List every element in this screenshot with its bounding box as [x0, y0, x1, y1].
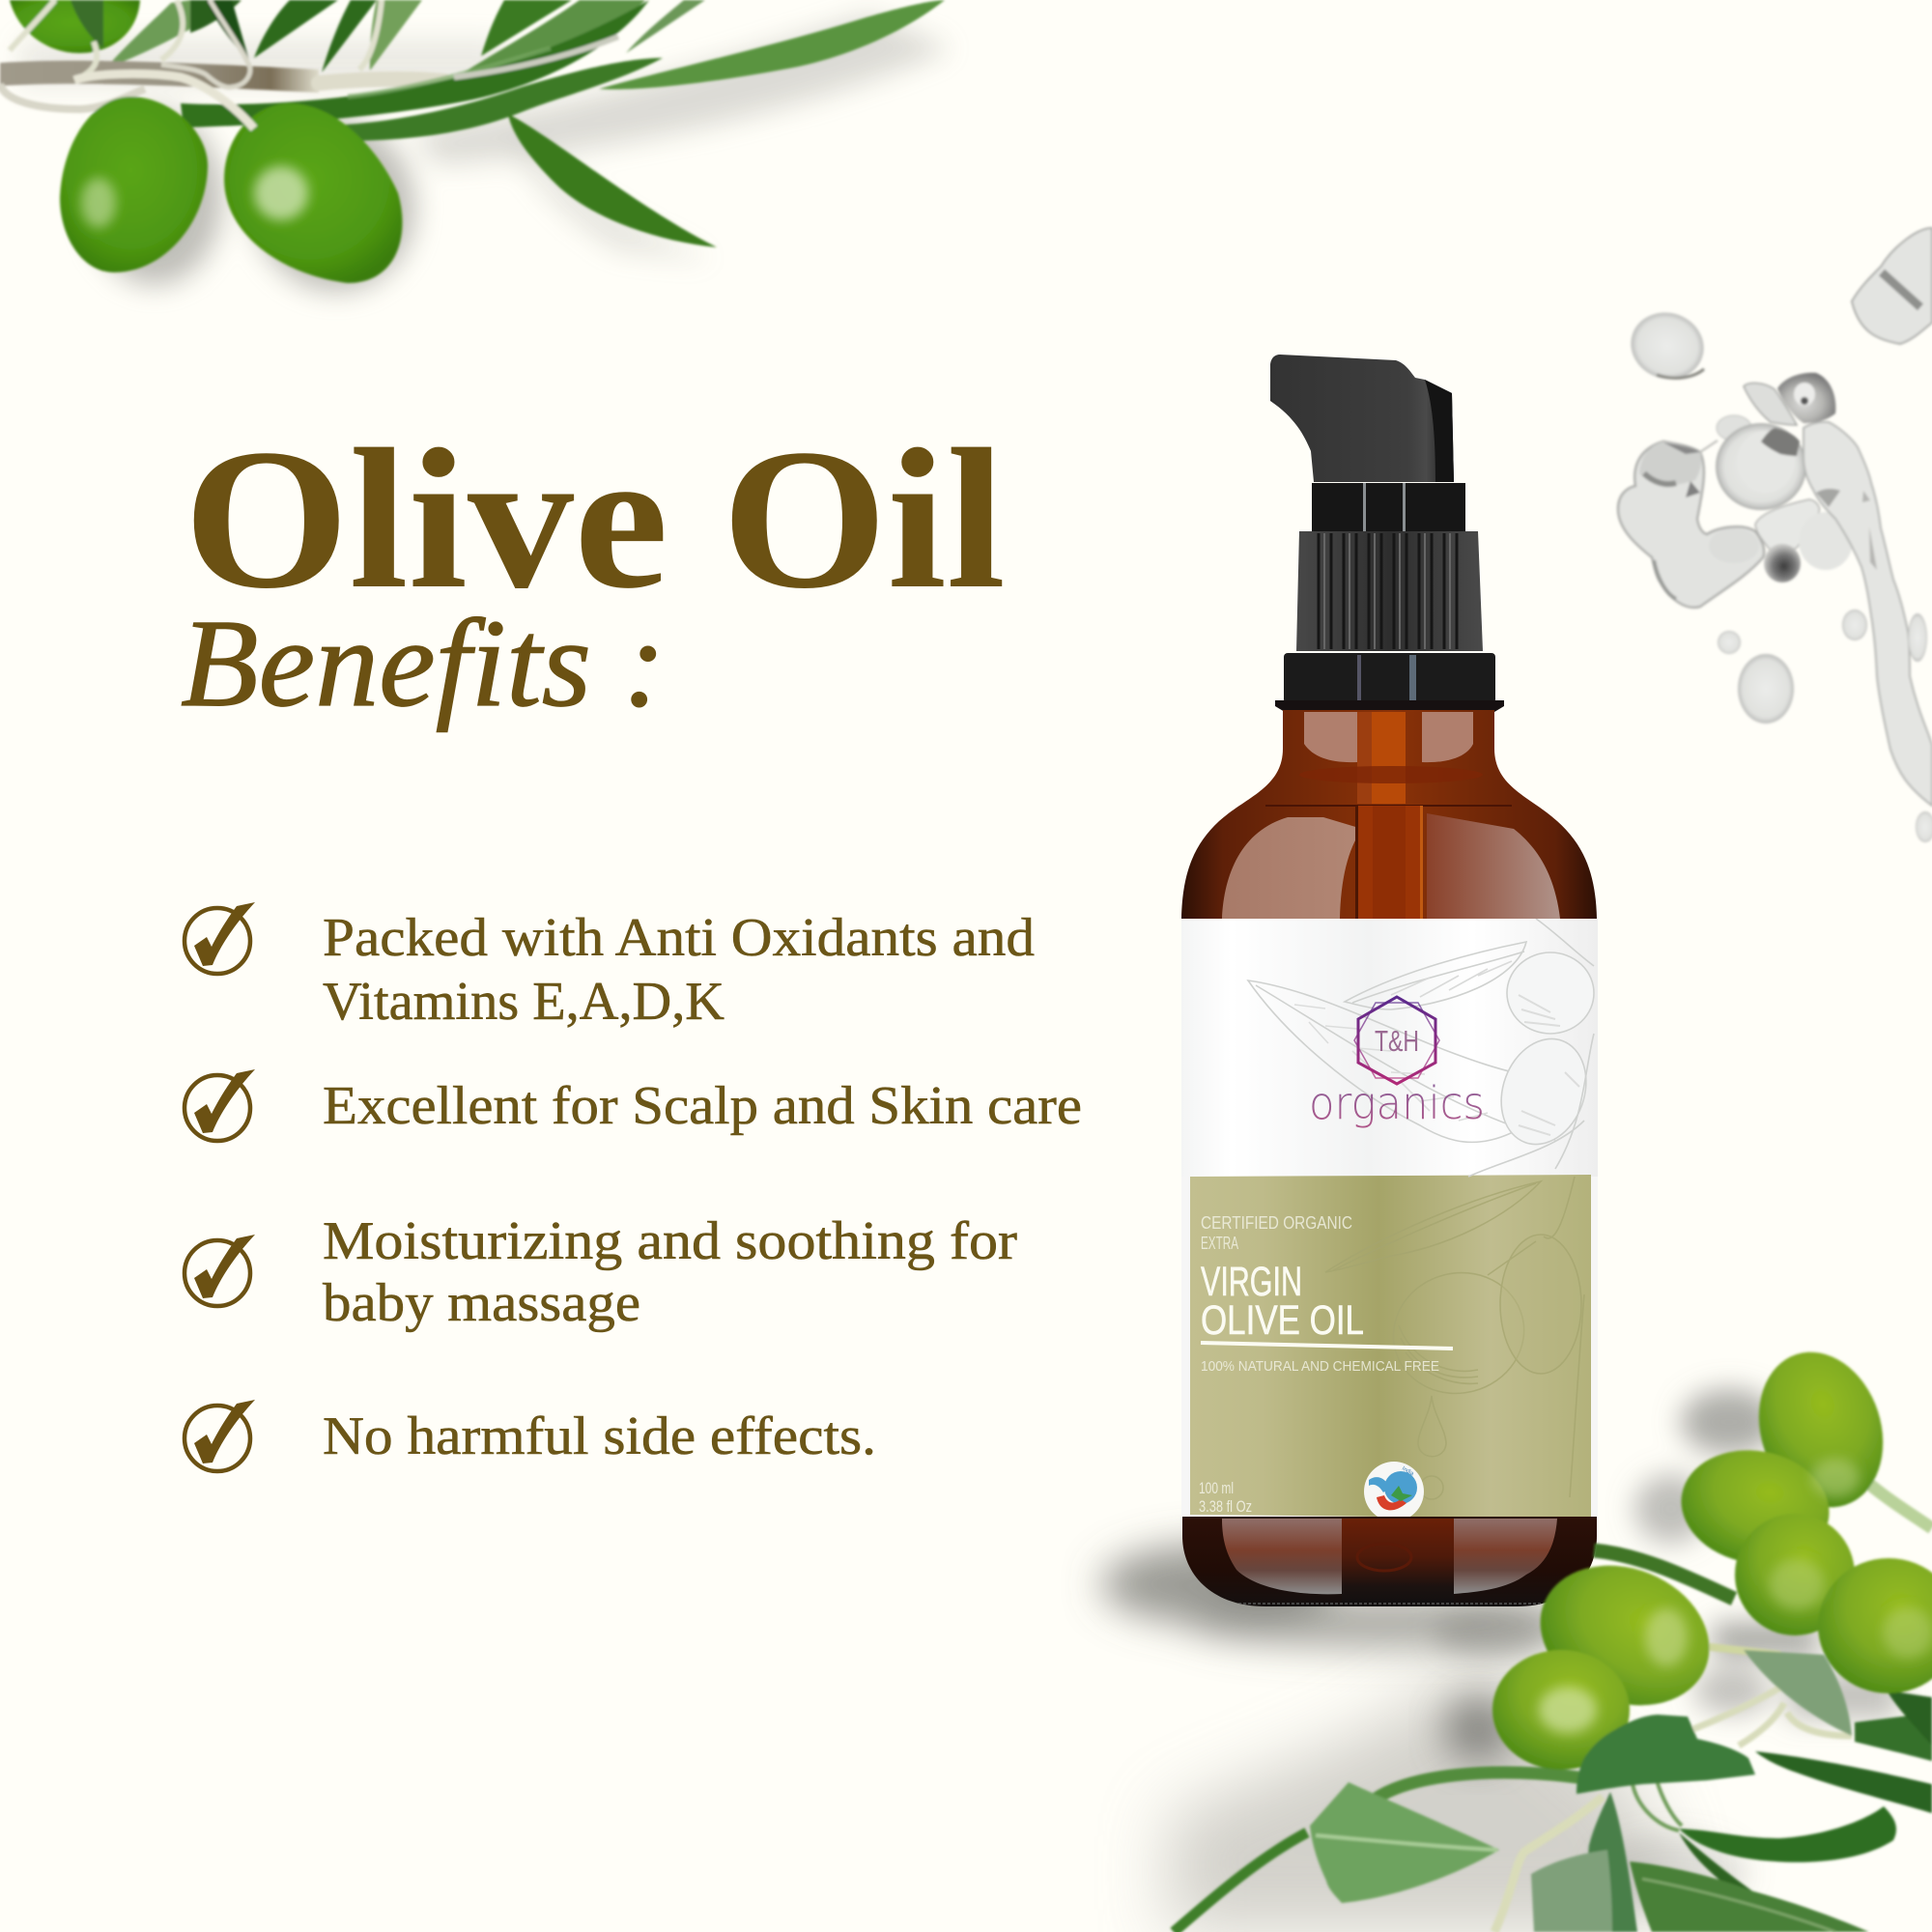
oil lower blob: [1755, 499, 1819, 552]
benefit 4: [185, 1400, 876, 1471]
dark drop: [1764, 544, 1801, 582]
logo hexagon: [1354, 997, 1439, 1084]
product name: VIRGIN: [1201, 1259, 1302, 1305]
volume oz: 3.38 fl Oz: [1199, 1497, 1252, 1516]
label white: [1181, 919, 1598, 1179]
twig to olive: [74, 73, 254, 128]
flange: [1275, 700, 1504, 712]
olives: [1492, 1336, 1932, 1770]
oil top piece: [1744, 384, 1797, 425]
dark leaves: [1588, 1690, 1932, 1932]
benefit 1: [185, 902, 1035, 1032]
olive highlights: [1539, 1459, 1932, 1733]
benefit text 3: Moisturizing and soothing for: [323, 1211, 1017, 1271]
branch stem: [0, 0, 444, 109]
oil blob left: [1618, 441, 1764, 608]
logo initials: T&H: [1375, 1024, 1419, 1058]
logo: [1309, 997, 1485, 1129]
shoulder reflections: [1222, 817, 1362, 919]
label text: [1199, 1212, 1453, 1516]
pump spout: [1270, 355, 1454, 482]
oil droplet: [1622, 303, 1713, 388]
glass base: [1182, 1517, 1597, 1606]
bottle: [1181, 355, 1601, 1606]
pale leaf lower: [1531, 1850, 1612, 1932]
glass body: [1181, 710, 1597, 919]
benefit text 4: No harmful side effects.: [323, 1406, 876, 1466]
check icon 3: [185, 1235, 255, 1306]
bottle shadow: [1101, 1544, 1594, 1648]
benefit 3: [185, 1211, 1017, 1333]
check icon 2: [185, 1069, 255, 1141]
oil small lobe: [1717, 415, 1751, 440]
green leaf lower: [328, 58, 663, 141]
pale leaf small: [1744, 1650, 1852, 1736]
benefit text 2: Excellent for Scalp and Skin care: [323, 1076, 1082, 1136]
hanging leaf: [508, 114, 717, 247]
check icon 4: [185, 1400, 255, 1471]
oil dome: [1777, 373, 1835, 423]
ribbed cap: [1296, 531, 1483, 651]
oil blob centre: [1717, 424, 1805, 509]
logo wordmark: organics: [1309, 1077, 1485, 1129]
oil splash: [1618, 228, 1932, 842]
stems and twigs: [1174, 1474, 1932, 1932]
extra text: EXTRA: [1201, 1233, 1238, 1253]
benefit text 1: Vitamins E,A,D,K: [323, 972, 724, 1032]
olive left: [60, 97, 208, 272]
subtitle: Benefits :: [181, 594, 666, 733]
certified text: CERTIFIED ORGANIC: [1201, 1212, 1352, 1233]
benefit text 3: baby massage: [323, 1273, 640, 1333]
label botanical sketch: [1248, 919, 1601, 1499]
green leaf upper: [181, 0, 649, 128]
oil blob top right: [1852, 228, 1932, 344]
rule: [1201, 1343, 1453, 1349]
big dark leaf: [1577, 1715, 1755, 1794]
natural claim: 100% NATURAL AND CHEMICAL FREE: [1201, 1358, 1439, 1375]
top-left olive: [10, 0, 140, 53]
bottom-right plant shadow: [1169, 1389, 1898, 1932]
dark shadow by olive: [1443, 1696, 1513, 1762]
title: Olive Oil: [184, 408, 1006, 630]
oil stream: [1804, 422, 1932, 806]
thin link: [1700, 440, 1718, 452]
volume: 100 ml: [1199, 1479, 1234, 1497]
branch shadow: [19, 14, 952, 313]
bottom right olive branch: [1174, 1336, 1932, 1932]
top branch artwork: [0, 0, 945, 283]
pale leaf large: [1310, 1782, 1499, 1903]
product name line 2: OLIVE OIL: [1201, 1297, 1364, 1344]
wide shadow: [1169, 1662, 1671, 1932]
olive right: [224, 103, 402, 283]
badge: India: [1401, 1466, 1415, 1478]
pale twigs on leaves: [454, 37, 618, 77]
neck reflections: [1304, 712, 1357, 762]
oil right lobe: [1799, 512, 1853, 570]
pump collar: [1312, 483, 1465, 531]
benefits list: [185, 902, 1082, 1471]
benefit 2: [185, 1069, 1082, 1141]
upward leaves: [71, 0, 705, 72]
benefit text 1: Packed with Anti Oxidants and: [323, 908, 1035, 968]
top olive branch: [0, 0, 952, 313]
lower collar: [1284, 653, 1495, 703]
olive shadows: [1435, 1389, 1898, 1913]
check icon 1: [185, 902, 255, 974]
small drops: [1718, 610, 1932, 842]
label green: [1181, 1175, 1598, 1519]
badge: [1364, 1462, 1424, 1521]
long leaf: [599, 0, 945, 90]
